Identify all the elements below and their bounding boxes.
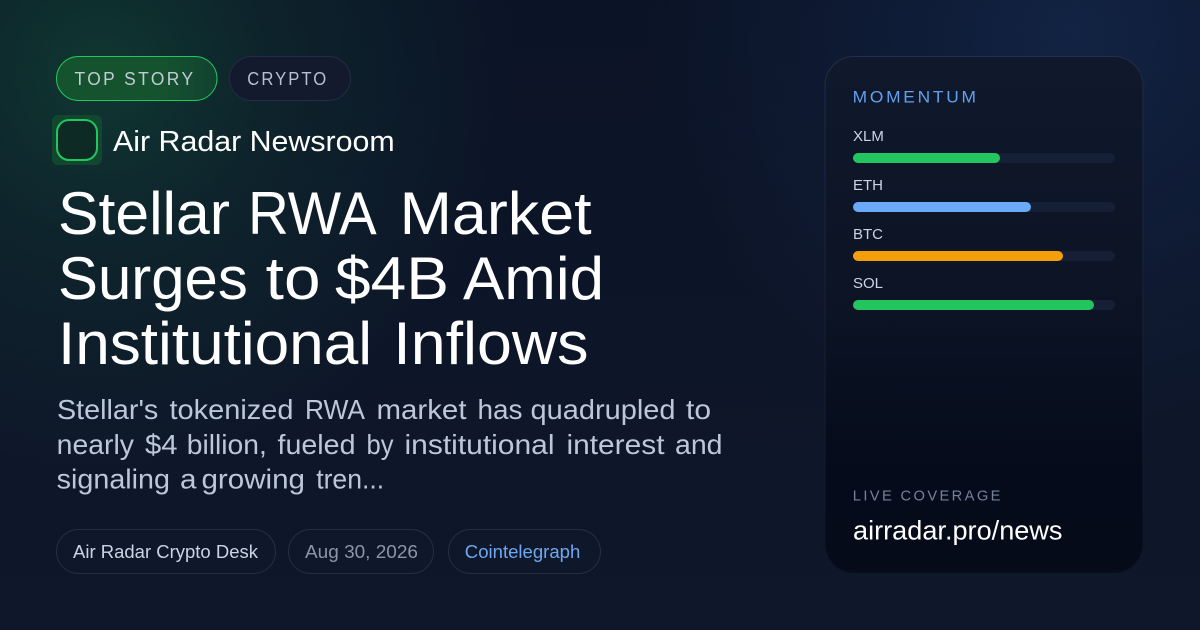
row: ETH: ETH xyxy=(853,177,883,194)
summary text: interest xyxy=(566,429,665,460)
summary text: and xyxy=(675,429,722,460)
headline: Inflows xyxy=(393,310,588,377)
row: XLM: XLM xyxy=(853,128,884,145)
tag: crypto: CRYPTO xyxy=(247,69,328,89)
coverage label: LIVE COVERAGE xyxy=(853,488,1003,504)
summary text: $4 xyxy=(145,429,178,460)
summary text: market xyxy=(376,394,467,425)
meta pill: source: Cointelegraph xyxy=(465,542,580,562)
summary text: a xyxy=(180,464,197,494)
momentum heading: MOMENTUM xyxy=(853,88,979,106)
summary text: quadrupled xyxy=(530,394,676,425)
summary text: Stellar's xyxy=(57,394,158,425)
row: BTC: BTC xyxy=(853,226,883,243)
meta pill: desk xyxy=(56,530,276,574)
tag: crypto xyxy=(230,56,350,100)
tag: top story: TOP STORY xyxy=(74,69,196,89)
headline xyxy=(58,180,604,377)
headline: Surges xyxy=(58,245,248,312)
summary text: institutional xyxy=(404,429,554,460)
summary text xyxy=(57,394,722,494)
headline: Amid xyxy=(463,245,604,312)
summary text: RWA xyxy=(305,394,365,425)
meta pill: source xyxy=(448,530,600,574)
headline: Institutional xyxy=(58,310,372,377)
summary text: has xyxy=(478,394,522,425)
headline: $4B xyxy=(335,245,449,312)
summary text: tokenized xyxy=(170,394,294,425)
coverage url: airradar.pro/news xyxy=(853,516,1062,546)
row: BTC xyxy=(853,226,1115,261)
meta pill: desk: Air Radar Crypto Desk xyxy=(73,542,259,562)
brand name: Air Radar Newsroom xyxy=(113,126,395,158)
summary text: billion, xyxy=(187,429,267,460)
headline: Stellar xyxy=(58,180,230,247)
summary text: fueled xyxy=(278,429,356,460)
panel: momentum xyxy=(825,56,1143,573)
summary text: by xyxy=(366,429,394,460)
tag: top story xyxy=(56,56,217,100)
row: SOL: SOL xyxy=(853,275,883,292)
row: SOL xyxy=(853,275,1115,310)
headline: RWA xyxy=(248,180,377,247)
summary text: signaling xyxy=(57,464,170,494)
summary text: nearly xyxy=(57,429,134,460)
summary text: to xyxy=(686,394,711,425)
headline: Market xyxy=(400,180,592,247)
meta pill: date xyxy=(288,530,434,574)
row: XLM xyxy=(853,128,1115,163)
row: ETH xyxy=(853,177,1115,212)
headline: to xyxy=(266,245,320,312)
summary text: tren... xyxy=(316,464,384,494)
icon: logo mark xyxy=(52,115,102,165)
summary text: growing xyxy=(202,464,305,494)
meta pill: date: Aug 30, 2026 xyxy=(305,542,418,562)
